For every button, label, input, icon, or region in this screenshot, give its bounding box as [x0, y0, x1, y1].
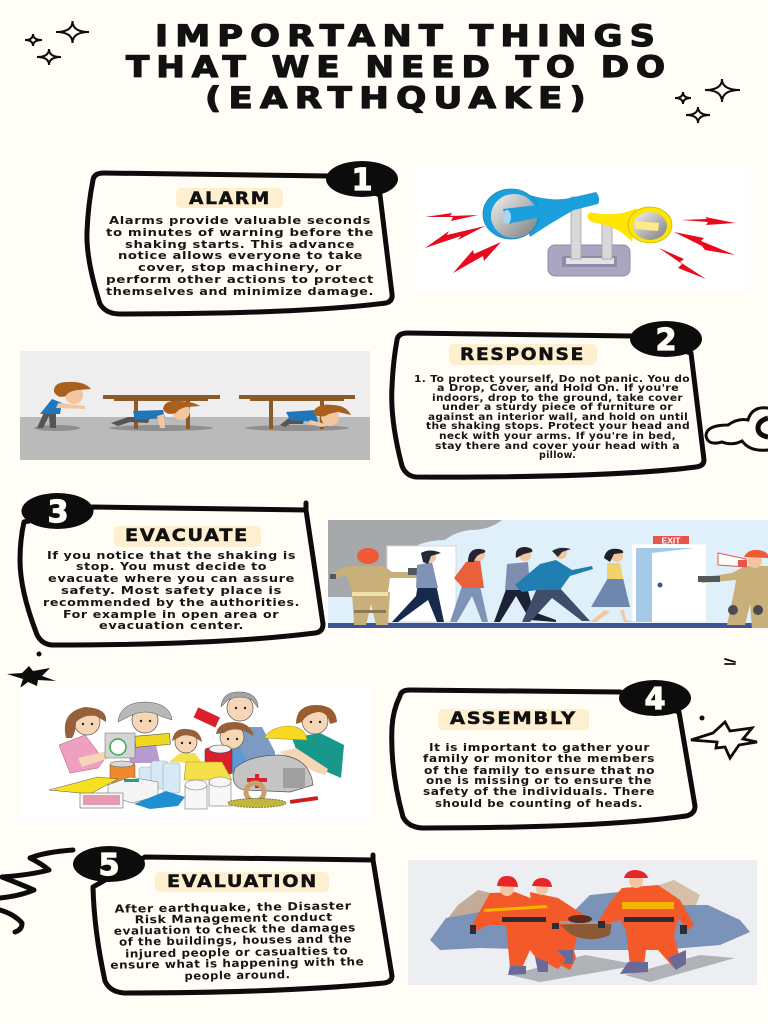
text: alarm description: to minutes of warning before the	[106, 226, 374, 239]
icon: boy	[215, 722, 254, 775]
text: evacuate description: stop. You must decide to	[76, 560, 267, 573]
icon: firefighter left	[330, 548, 432, 625]
icon: person yellow top	[590, 549, 637, 622]
text: response description: the shaking stops. Protect your head and	[426, 421, 690, 432]
text: alarm description: themselves and minimize damage.	[106, 285, 374, 298]
icon: yellow megaphone	[587, 207, 672, 243]
icon: radio	[105, 733, 170, 758]
icon: firefighter right with megaphone	[698, 550, 768, 628]
heading: response	[449, 344, 597, 365]
icon: toilet rolls	[185, 777, 231, 809]
icon: girl	[169, 729, 202, 763]
text: evaluation description: Risk Management conduct	[135, 911, 333, 926]
text: response description: a Drop, Cover, and Hold On. If you're	[437, 383, 679, 394]
text: response description: against an interior wall, and hold on until	[428, 412, 688, 423]
text: alarm description: Alarms provide valuable seconds	[109, 214, 371, 227]
number badge 1: 1	[352, 163, 372, 198]
icon: exit door: EXIT	[662, 536, 681, 546]
heading: evacuate	[114, 526, 261, 547]
text: assembly description: It is important to gather your	[429, 741, 650, 754]
icon: red canister	[205, 745, 232, 774]
number badge 5	[73, 846, 145, 883]
number badge 3: 3	[48, 495, 68, 530]
title	[126, 19, 672, 115]
icon: backpack	[233, 755, 313, 792]
icon: red tool	[290, 796, 318, 804]
icon: family photo	[80, 793, 123, 808]
text: evacuate description: recommended by the authorities.	[43, 596, 300, 609]
icon: front rescuer right	[598, 870, 694, 974]
heading: alarm: ALARM	[189, 189, 271, 208]
icon: person blue shirt	[515, 547, 593, 622]
heading: response: RESPONSE	[460, 345, 585, 364]
icon: sparkles top right	[675, 79, 740, 123]
title: IMPORTANT THINGS	[155, 19, 662, 53]
text: evaluation description	[109, 899, 365, 984]
icon: exit door	[632, 536, 706, 622]
text: assembly description: safety of the individuals. There	[423, 785, 655, 798]
number badge 4	[619, 680, 691, 717]
icon: sparkles top left	[25, 21, 89, 65]
panel: assembly	[392, 680, 695, 828]
icon: table one	[103, 395, 220, 429]
panel: alarm	[87, 161, 398, 314]
icon: yellow helmet	[264, 726, 307, 740]
text: evaluation description: ensure what is happening with the	[110, 955, 364, 972]
text: assembly description: of the family to ensure that no	[424, 764, 655, 777]
panel: evaluation	[73, 846, 392, 993]
icon: stretcher	[558, 915, 612, 939]
heading: evaluation: EVALUATION	[167, 872, 318, 891]
text: evaluation description: of the buildings, houses and the	[119, 932, 352, 949]
number badge 5: 5	[99, 848, 119, 883]
number badge 2: 2	[656, 323, 676, 358]
icon: first aid box	[108, 777, 158, 803]
text: alarm description: shaking starts. This advance	[125, 238, 355, 251]
icon: red lightning bolts	[425, 213, 735, 279]
title: THAT WE NEED TO DO	[126, 50, 672, 84]
title: (EARTHQUAKE)	[205, 81, 593, 115]
icon: grandfather	[221, 692, 275, 760]
icon: crawling boy	[111, 401, 200, 428]
icon: dash marks	[725, 659, 735, 664]
text: evaluation description: evaluation to check the damages	[114, 921, 356, 938]
heading: assembly	[438, 709, 589, 730]
text: response description: stay there and cover your head with a	[435, 441, 680, 452]
text: evacuate description: evacuation center.	[99, 619, 244, 632]
icon: grandmother	[118, 702, 172, 763]
panel: response	[392, 321, 704, 477]
icon: scribbled star left	[7, 666, 56, 688]
text: evacuate description: safety. Most safety place is	[61, 584, 282, 597]
icon: standing boy	[37, 382, 91, 428]
text: alarm description: perform other actions to protect	[106, 273, 374, 286]
icon: rope	[228, 798, 286, 808]
icon: scribbled star right	[691, 722, 757, 758]
icon: table two	[239, 395, 355, 429]
icon: yellow tray	[184, 762, 232, 780]
icon: small black dot	[36, 652, 42, 656]
number badge 4: 4	[645, 682, 665, 717]
text: evacuate description: evacuate where you can assure	[48, 572, 295, 585]
image: evacuation scene	[328, 520, 768, 628]
icon: squiggle left	[0, 850, 73, 932]
image: family emergency kit	[20, 687, 371, 822]
heading: assembly: ASSEMBLY	[450, 709, 577, 728]
heading: evacuate: EVACUATE	[125, 526, 249, 545]
text: assembly description	[423, 741, 655, 810]
icon: scribble cloud	[706, 408, 768, 450]
icon: dot near star	[700, 716, 704, 720]
panel: evacuate	[20, 493, 323, 645]
text: evaluation description: injured people or casualties to	[125, 944, 348, 961]
icon: covering boy	[280, 405, 351, 427]
icon: water bottles	[139, 761, 180, 793]
icon: yellow folder	[49, 777, 118, 794]
icon: person red jacket	[450, 549, 488, 622]
text: assembly description: one is missing or to ensure the	[426, 774, 652, 787]
icon: stand base	[548, 245, 630, 276]
icon: red item in hand	[194, 707, 220, 728]
icon: father	[279, 705, 344, 778]
icon: mother	[59, 707, 112, 773]
icon: family eyes	[82, 707, 321, 744]
text: response description: neck with your arms. If you're in bed,	[439, 431, 676, 442]
number badge 2	[630, 321, 702, 358]
text: response description: indoors, drop to the ground, take cover	[432, 393, 683, 404]
image: rescuers with stretcher	[408, 860, 757, 985]
number badge 3	[22, 493, 94, 530]
text: response description: 1. To protect yourself, Do not panic. You do	[414, 374, 690, 385]
shadows	[510, 955, 735, 982]
floor strip	[328, 623, 768, 628]
text: evaluation description: people around.	[184, 968, 291, 983]
text: evacuate description	[43, 549, 300, 632]
text: assembly description: family or monitor the members	[423, 752, 655, 765]
icon: front rescuer left	[470, 876, 566, 975]
text: evacuate description: For example in open area or	[63, 608, 279, 621]
text: response description: pillow.	[539, 450, 576, 461]
icon: person gray coat	[494, 547, 556, 622]
number badge 1	[326, 161, 398, 198]
icon: back rescuer	[530, 878, 584, 970]
text: response description: under a sturdy piece of furniture or	[442, 402, 673, 413]
icon: person gray jacket	[392, 550, 444, 622]
image: alarm megaphones	[417, 166, 750, 292]
icon: blue book	[134, 791, 185, 809]
icon: tape ring	[246, 783, 264, 801]
text: evacuate description: If you notice that the shaking is	[47, 549, 296, 562]
text: response description	[414, 374, 690, 461]
text: alarm description	[106, 214, 374, 298]
text: alarm description: notice allows everyone to take	[118, 249, 363, 262]
icon: rubble	[430, 880, 750, 950]
icon: blue megaphone	[483, 189, 599, 239]
icon: orange can	[110, 761, 135, 783]
image: drop cover hold on	[20, 351, 370, 460]
text: evaluation description: After earthquake, the Disaster	[114, 899, 352, 916]
text: assembly description: should be counting of heads.	[435, 797, 643, 810]
text: alarm description: cover, stop machinery, or	[138, 261, 342, 274]
heading: alarm	[176, 188, 283, 208]
